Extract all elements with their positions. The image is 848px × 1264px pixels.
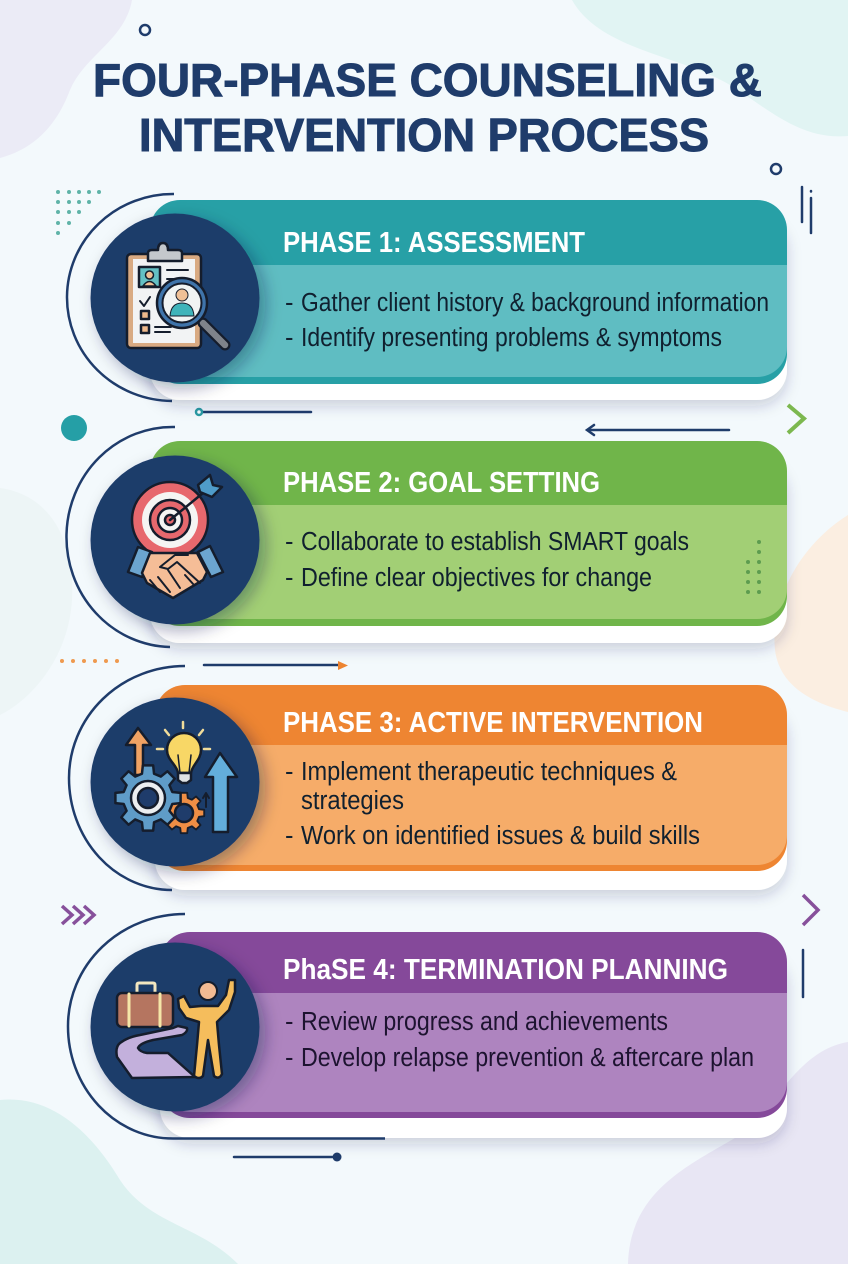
phase 2 bullets: - [285,564,294,592]
title: INTERVENTION PROCESS [139,109,709,161]
phase 3 bullets: Work on identified issues & build skills [301,822,700,850]
phase 1 bullets: - [285,324,294,352]
phase 4 bullets: Review progress and achievements [301,1008,668,1036]
phase 4 bullets: Develop relapse prevention & aftercare plan [301,1044,754,1072]
panel: phase 3 [69,666,787,890]
dotted line: orange [60,659,119,663]
phase 3 heading: PHASE 3: ACTIVE INTERVENTION [283,707,703,739]
arrowhead: orange [338,661,348,670]
phase 1 bullets: Identify presenting problems & symptoms [301,324,722,352]
icon: suitcase, path and person [116,980,235,1078]
chevron: purple [803,895,818,925]
phase 1 bullets: - [285,289,294,317]
phase 3 circle [90,698,260,866]
phase 3 bullets [285,758,700,850]
phase 1 ring [67,194,174,401]
phase 2 circle [90,456,260,624]
panel: phase 2 [66,427,787,647]
phase 4 bullets: - [285,1044,294,1072]
bulb rays [157,722,210,749]
phase 1 bullets: Gather client history & background information [301,289,769,317]
phase 2 bullets: Define clear objectives for change [301,564,652,592]
phase 3 bullets: - [285,822,294,850]
title [93,54,762,161]
phase 1 heading: PHASE 1: ASSESSMENT [283,227,585,259]
phase 2 bullets [285,528,689,592]
phase 4 ring [68,914,385,1138]
phase 1 bullets [285,289,769,352]
decorative accents [140,25,811,1157]
phase 4 bullets: - [285,1008,294,1036]
panel: phase 4 [68,914,787,1138]
dot grid: teal [56,190,101,235]
icon: gears, bulb and arrows [115,728,237,833]
phase 3 bullets: Implement therapeutic techniques & [301,758,677,786]
phase 2 bullets: - [285,528,294,556]
phase 1 circle [90,214,260,382]
teal dot [61,415,87,441]
icon: clipboard with magnifier [127,243,225,348]
phase 2 ring [66,427,175,647]
triple chevrons: purple [62,906,94,924]
phase 2 bullets: Collaborate to establish SMART goals [301,528,689,556]
phase 2 heading: PHASE 2: GOAL SETTING [283,467,600,499]
panel: phase 1 [67,194,787,401]
icon: target and handshake [128,475,223,598]
phase 3 bullets: strategies [301,787,404,815]
dots: green [746,540,761,594]
phase 4 heading: PhaSE 4: TERMINATION PLANNING [283,954,728,986]
title: FOUR-PHASE COUNSELING & [93,54,762,106]
end dot [332,1152,342,1162]
phase 3 bullets: - [285,758,294,786]
phase 4 bullets [285,1008,754,1072]
phase 4 circle [90,942,260,1112]
chevron: green [788,405,804,433]
phase 3 ring [69,666,185,890]
